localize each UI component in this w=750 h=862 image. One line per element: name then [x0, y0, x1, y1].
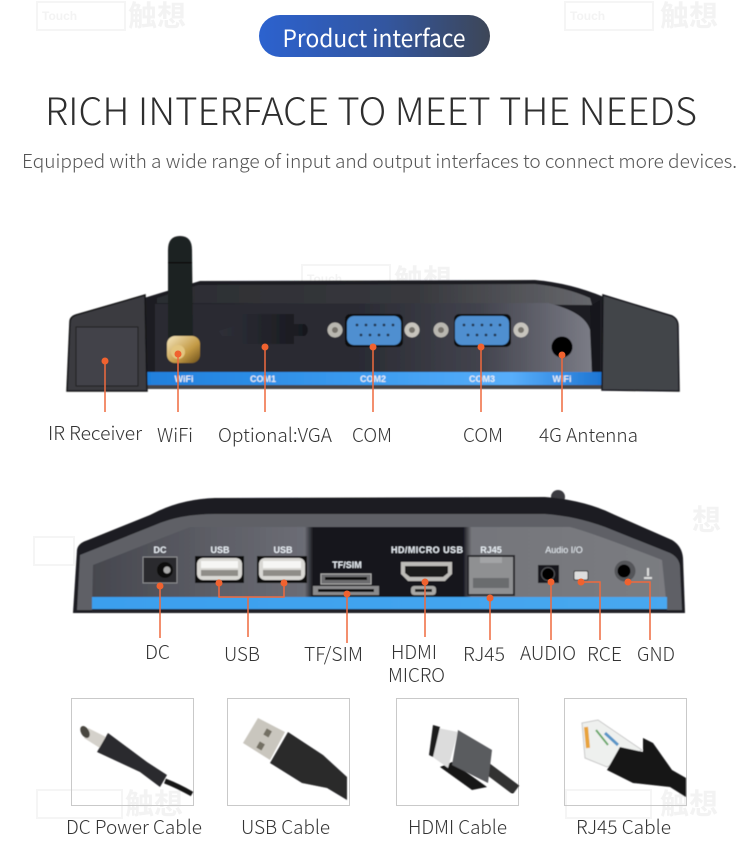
- icon: DC plug: [78, 724, 192, 794]
- labels: top device: COM: [463, 421, 503, 448]
- device: rear view with COM ports: [67, 236, 679, 391]
- watermark: 触想: [394, 257, 452, 299]
- port: HDMI and micro USB: HD/MICRO USB: [391, 545, 464, 555]
- device inner panel: [155, 303, 592, 373]
- port: HDMI and micro USB: [391, 545, 464, 595]
- watermark: Touch: [570, 9, 605, 23]
- labels: side device: RJ45: [463, 640, 505, 667]
- device: side view with USB and HDMI ports: [73, 490, 685, 613]
- port: audio: Audio I/O: [545, 545, 583, 555]
- labels: side device: DC: [145, 638, 170, 665]
- watermark: 想: [692, 497, 721, 539]
- port: COM3: [434, 314, 528, 384]
- labels: side device: RCE: [587, 640, 622, 667]
- right bracket: [602, 295, 679, 391]
- port: GND jack: [614, 560, 652, 582]
- port: USB 2: [257, 545, 307, 583]
- port: RJ45: [467, 545, 515, 596]
- watermark: Touch: [42, 9, 77, 23]
- labels: side device: [145, 638, 675, 688]
- antenna: WiFi: [167, 236, 200, 363]
- labels: top device: COM: [352, 421, 392, 448]
- left bracket: IR receiver: [67, 295, 147, 391]
- callouts: top device: [102, 344, 566, 412]
- port: COM3: COM3: [469, 374, 495, 384]
- icon: HDMI plug: [429, 725, 516, 790]
- port: RCE: [574, 571, 588, 580]
- port: COM2: COM2: [360, 374, 386, 384]
- cable label: RJ45 Cable: [576, 813, 671, 840]
- port: DC: [143, 545, 177, 583]
- port: COM2: [328, 314, 420, 384]
- blue strip: [92, 597, 667, 609]
- watermark: 触想: [660, 781, 718, 823]
- labels: side device: MICRO: [388, 661, 445, 688]
- labels: top device: Optional:VGA: [218, 421, 333, 448]
- watermark: 触想: [125, 781, 183, 823]
- port: USB 2: USB: [273, 545, 293, 555]
- port: audio: [538, 545, 583, 583]
- cable label: DC Power Cable: [66, 813, 202, 840]
- port: USB 1: [195, 545, 244, 583]
- device body: [73, 497, 685, 613]
- panel: HDMI cable: [396, 698, 518, 840]
- blue label strip: [146, 372, 603, 385]
- badge: Product interface: [259, 15, 490, 57]
- device body top: [144, 280, 604, 389]
- labels: top device: [48, 419, 638, 448]
- panel: DC power cable: [66, 698, 202, 840]
- labels: side device: USB: [224, 640, 260, 667]
- labels: side device: TF/SIM: [304, 640, 363, 667]
- optional VGA blank: [219, 314, 308, 344]
- port: RJ45: RJ45: [480, 545, 502, 555]
- port: TF/SIM: [313, 560, 379, 595]
- labels: side device: HDMI: [391, 638, 437, 665]
- port: USB 1: USB: [210, 545, 230, 555]
- labels: top device: WiFi: [157, 421, 193, 448]
- icon: RJ45 plug: [582, 720, 686, 797]
- watermark: Touch: [307, 272, 342, 286]
- panel: RJ45 cable: [564, 698, 686, 840]
- inner panel: [92, 527, 667, 609]
- strip text: [175, 374, 571, 384]
- labels: top device: 4G Antenna: [539, 421, 638, 448]
- labels: top device: IR Receiver: [48, 419, 142, 446]
- badge: Product interface: Product interface: [282, 19, 466, 54]
- panel: USB cable: [228, 698, 350, 840]
- callouts: side device: [156, 578, 650, 643]
- strip text: WiFi: [553, 374, 571, 384]
- strip text: COM1: [250, 374, 276, 384]
- icon: USB plug: [243, 718, 347, 800]
- subtitle: Equipped with a wide range of input and output interfaces to connect more devices.: [22, 147, 737, 174]
- strip text: WiFi: [175, 374, 193, 384]
- port: TF/SIM: TF/SIM: [332, 560, 362, 570]
- port: DC: DC: [154, 545, 167, 555]
- cable label: USB Cable: [241, 813, 330, 840]
- labels: side device: GND: [637, 640, 675, 667]
- cable label: HDMI Cable: [408, 813, 507, 840]
- title: RICH INTERFACE TO MEET THE NEEDS: [45, 81, 697, 136]
- labels: side device: AUDIO: [520, 639, 576, 666]
- port: 4G antenna hole: [552, 336, 572, 358]
